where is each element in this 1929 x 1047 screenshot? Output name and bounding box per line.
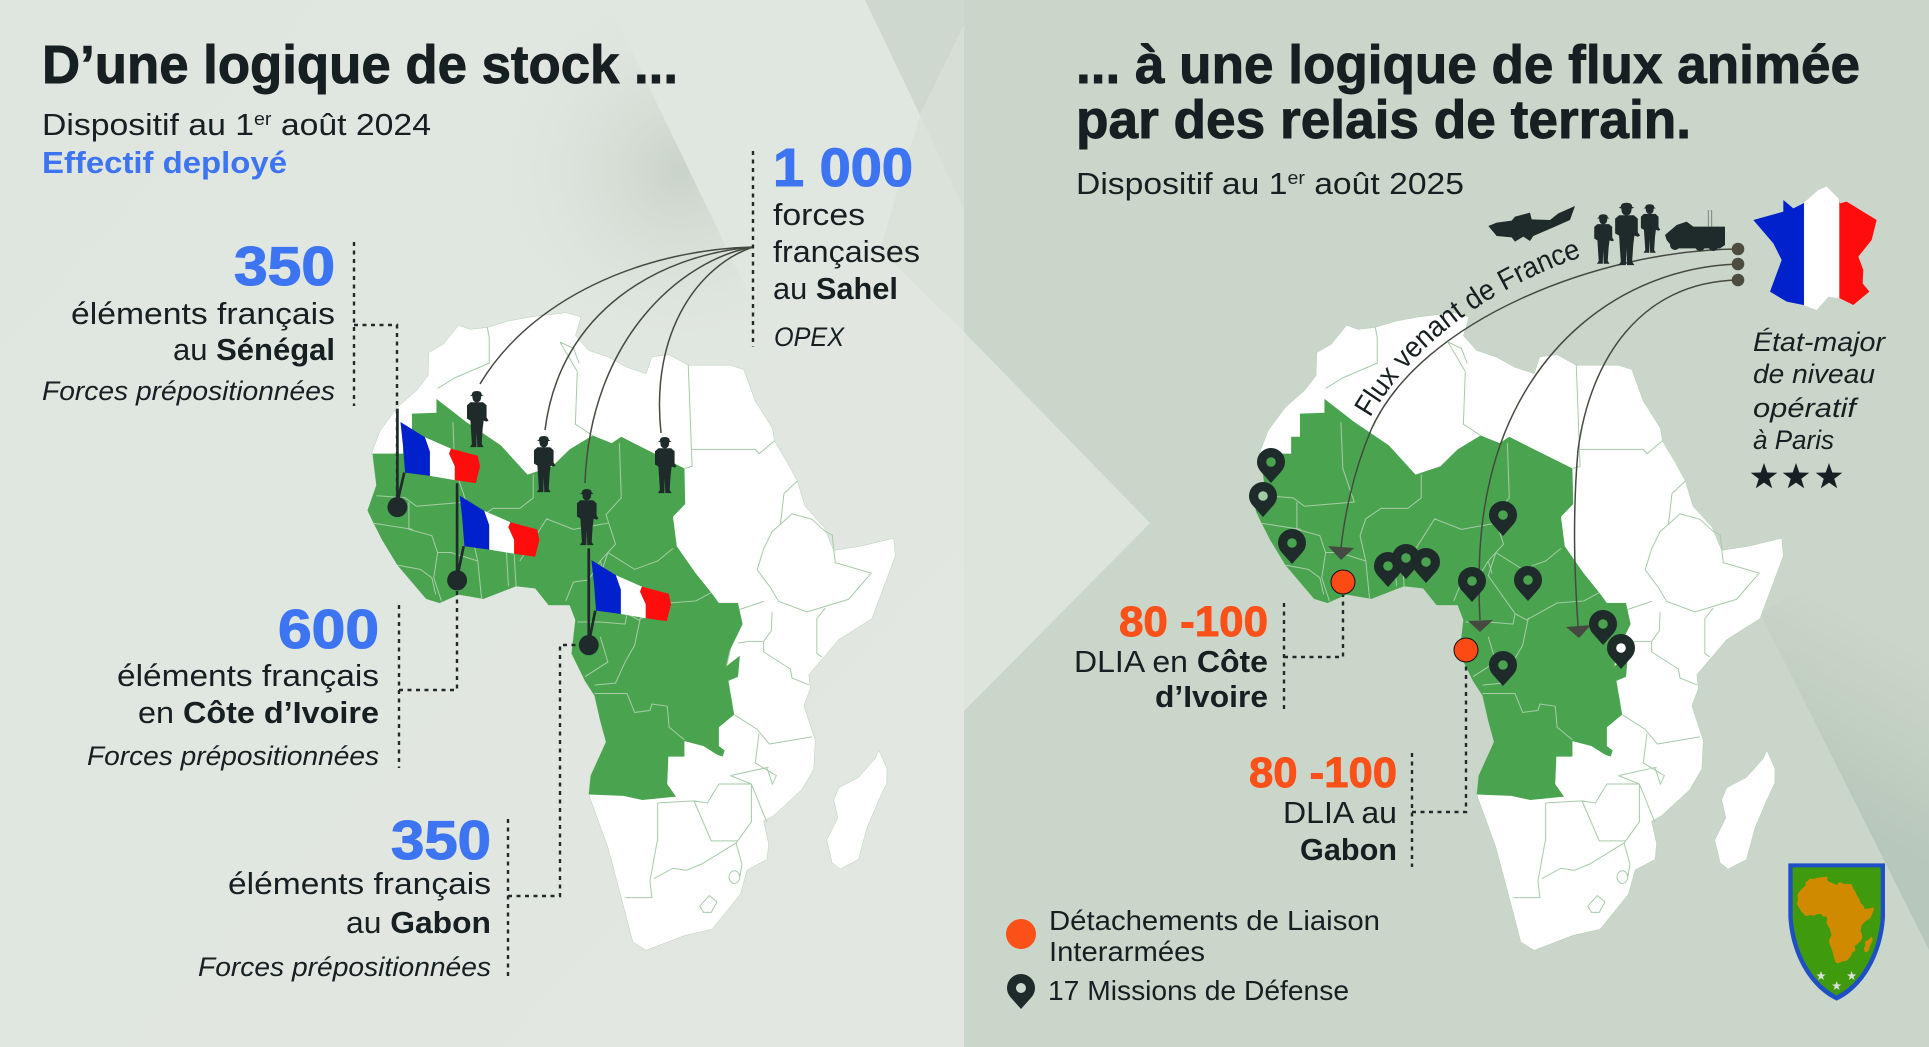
subtitle right: Dispositif au 1	[1076, 166, 1271, 201]
heading right: par des relais de terrain.	[1076, 90, 1691, 150]
emblem: shield	[1788, 863, 1885, 1001]
text: état-major: à Paris	[1753, 425, 1834, 455]
block: 350 Sénégal: éléments français	[71, 296, 335, 331]
block: DLIA Côte d'Ivoire: d’Ivoire	[1155, 679, 1268, 714]
block: 1000 Sahel: 1 000	[773, 138, 913, 198]
legend: 17 Missions de Défense	[1048, 975, 1349, 1006]
block: DLIA Gabon: 80 -100	[1249, 749, 1397, 797]
block: 1000 Sahel: forces	[773, 197, 865, 232]
icons: plane, soldiers, vehicle	[1488, 203, 1725, 265]
block: 350 Sénégal: 350	[234, 235, 335, 297]
flag: Gabon	[579, 548, 671, 655]
block: 350 Gabon: au Gabon	[346, 905, 491, 940]
block: DLIA Gabon: DLIA au	[1283, 795, 1397, 830]
block: 1000 Sahel: françaises	[773, 234, 920, 269]
arcs: flows from France	[1328, 243, 1744, 638]
heading left: D’une logique de stock ...	[42, 35, 678, 95]
block: 350 Gabon: éléments français	[228, 866, 491, 901]
block: DLIA Côte d'Ivoire	[1074, 598, 1268, 714]
block: 1000 Sahel: OPEX	[774, 322, 845, 352]
block: 600 Côte d'Ivoire: Forces prépositionnées	[87, 741, 379, 771]
block: 600 Côte d'Ivoire: 600	[278, 598, 379, 660]
block: 600 Côte d'Ivoire	[87, 598, 379, 771]
block: 1000 Sahel	[773, 138, 920, 352]
leader lines right	[1284, 595, 1466, 867]
block: 350 Gabon: Forces prépositionnées	[198, 952, 491, 982]
label: flux venant de France: Flux venant de France	[1354, 244, 1580, 416]
subtitle right: août 2025	[1305, 166, 1464, 201]
block: 350 Sénégal	[42, 235, 335, 406]
block: DLIA Gabon	[1249, 749, 1397, 867]
flag: Côte d'Ivoire	[447, 483, 539, 590]
subtitle left: août 2024	[271, 107, 431, 142]
text: état-major: de niveau	[1753, 359, 1875, 389]
heading right: ... à une logique de flux animée	[1076, 35, 1860, 95]
legend: Interarmées	[1049, 936, 1205, 967]
block: 600 Côte d'Ivoire: en Côte d’Ivoire	[138, 695, 379, 730]
markers: DLIA orange dots	[1331, 570, 1478, 662]
leader lines left	[354, 151, 753, 978]
subtitle left: Dispositif au 1	[42, 107, 237, 142]
block: 350 Sénégal: au Sénégal	[173, 332, 335, 367]
subtitle right: er	[1287, 168, 1305, 188]
icons: soldiers left	[467, 391, 677, 545]
heading right	[1076, 35, 1860, 150]
text: état-major: opératif	[1753, 393, 1859, 423]
text: état-major: État-major	[1753, 327, 1886, 357]
map: right Africa	[1256, 313, 1783, 950]
arcs: Sahel forces	[480, 247, 753, 483]
subtitle left: er	[254, 109, 271, 129]
icon: France map tricolor	[1750, 183, 1879, 313]
text: état-major	[1753, 327, 1886, 455]
block: DLIA Côte d'Ivoire: DLIA en Côte	[1074, 644, 1268, 679]
icons: mission pins	[1249, 448, 1635, 686]
legend	[1006, 905, 1380, 1009]
block: 350 Gabon: 350	[391, 809, 491, 871]
block: DLIA Côte d'Ivoire: 80 -100	[1119, 598, 1268, 646]
flag: Sénégal	[387, 409, 480, 517]
block: DLIA Gabon: Gabon	[1300, 832, 1397, 867]
block: 350 Gabon	[198, 809, 491, 982]
map: left Africa	[368, 313, 895, 950]
icon: three stars	[1751, 463, 1842, 488]
legend: Détachements de Liaison	[1049, 905, 1380, 936]
block: 1000 Sahel: au Sahel	[773, 271, 898, 306]
block: 600 Côte d'Ivoire: éléments français	[117, 658, 379, 693]
label: effectif deployé: Effectif deployé	[42, 145, 287, 180]
block: 350 Sénégal: Forces prépositionnées	[42, 376, 335, 406]
